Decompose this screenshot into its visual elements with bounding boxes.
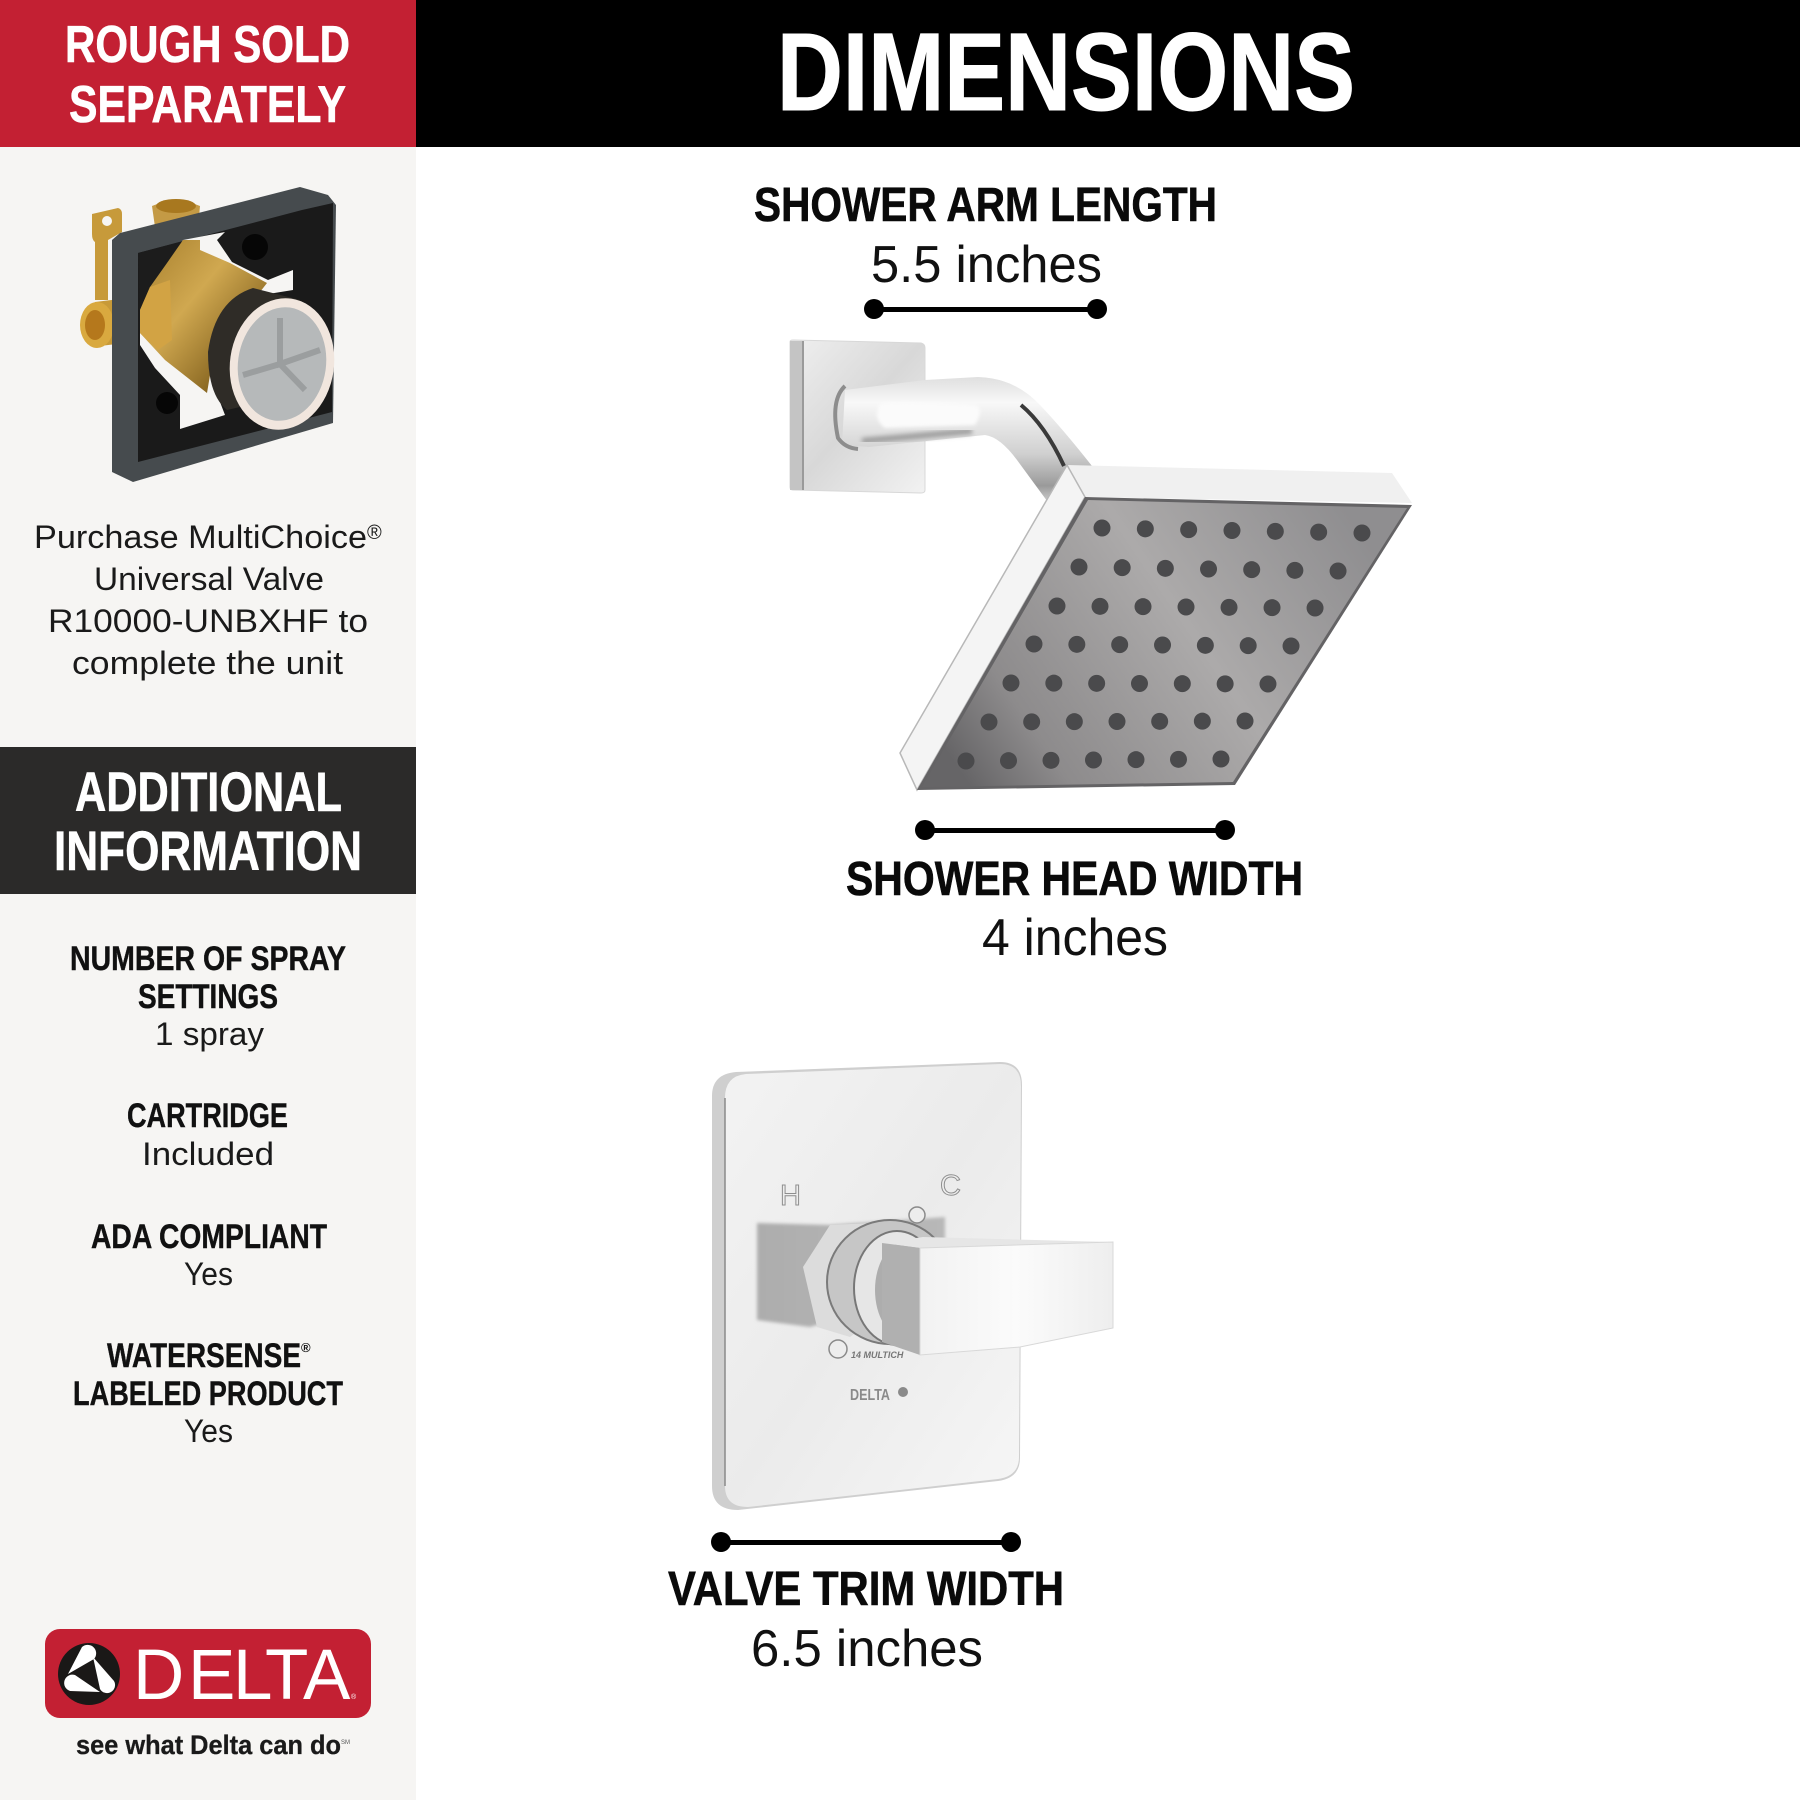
text: cartridge: [127, 1097, 288, 1172]
text: purchase note: Purchase MultiChoice: [34, 519, 367, 555]
dimension line: valve trim: [711, 1532, 1021, 1552]
valve body shadow: [757, 1217, 945, 1327]
text: cartridge: CARTRIDGE: [127, 1097, 288, 1135]
panel: left sidebar background: [0, 0, 416, 1800]
text: ada compliant: ADA COMPLIANT: [91, 1218, 327, 1256]
banner: additional information: ADDITIONAL: [75, 760, 342, 823]
text: purchase note: complete the unit: [72, 645, 343, 681]
banner: rough sold separately: ROUGH SOLD: [65, 16, 350, 74]
handle collar: [803, 1220, 953, 1345]
banner: additional information: INFORMATION: [54, 819, 362, 882]
text: purchase note: Universal Valve: [94, 561, 324, 597]
text: watersense labeled product: WATERSENSE: [107, 1337, 301, 1375]
label: valve trim width: 6.5 inches: [751, 1620, 983, 1678]
H and C markings: H: [780, 1180, 801, 1212]
banner: rough sold separately: SEPARATELY: [69, 76, 346, 134]
wall flange: [790, 340, 925, 493]
text: ada compliant: Yes: [184, 1256, 233, 1292]
text: watersense labeled product: ®: [301, 1340, 311, 1355]
banner: additional information: [0, 747, 416, 894]
dimension line: shower arm: [864, 299, 1107, 319]
label: valve trim width: [668, 1563, 1064, 1678]
text: purchase note: ®: [367, 522, 382, 544]
label: valve trim width: VALVE TRIM WIDTH: [668, 1563, 1064, 1616]
text: cartridge: Included: [142, 1136, 274, 1172]
dimension line: shower head: [915, 820, 1235, 840]
spray nozzles: [966, 528, 1362, 761]
label: shower arm length: 5.5 inches: [871, 236, 1102, 294]
screws: [829, 1207, 925, 1358]
plate logo mark: [898, 1387, 908, 1397]
H and C markings: [780, 1170, 961, 1212]
label: shower arm length: SHOWER ARM LENGTH: [754, 179, 1217, 232]
banner: dimensions title: [416, 0, 1800, 147]
text: purchase note: R10000-UNBXHF to: [48, 603, 368, 639]
H and C markings: C: [940, 1170, 961, 1202]
banner: rough sold separately: [0, 0, 416, 147]
logo: delta: [45, 1629, 371, 1760]
logo: delta: DELTA: [133, 1636, 351, 1715]
plate logo text: DELTA: [850, 1387, 890, 1404]
label: shower head width: SHOWER HEAD WIDTH: [846, 853, 1303, 906]
shower head spray face: [922, 500, 1407, 787]
logo: delta: ®: [351, 1693, 357, 1701]
text: watersense labeled product: LABELED PRODUCT: [73, 1375, 343, 1413]
tiny model text: 14 MULTICH: [851, 1350, 904, 1360]
illustration: shower head and arm: [790, 340, 1412, 790]
text: watersense labeled product: Yes: [184, 1413, 233, 1449]
text: number of spray settings: SETTINGS: [138, 978, 278, 1016]
text: number of spray settings: [70, 940, 346, 1052]
logo: delta: SM: [341, 1740, 350, 1746]
shower head body: [900, 465, 1412, 790]
text: watersense labeled product: [73, 1337, 343, 1449]
shower arm: [842, 377, 1092, 505]
logo: delta: see what Delta can do: [76, 1730, 341, 1760]
label: shower head width: 4 inches: [982, 909, 1168, 967]
text: number of spray settings: 1 spray: [155, 1016, 264, 1052]
label: shower head width: [846, 853, 1303, 967]
text: purchase note: [34, 519, 382, 681]
label: shower arm length: [754, 179, 1217, 294]
banner: dimensions title: DIMENSIONS: [777, 11, 1355, 134]
trim plate: [712, 1062, 1022, 1510]
text: ada compliant: [91, 1218, 327, 1292]
illustration: valve trim and handle: [712, 1062, 1113, 1510]
lever handle: [882, 1237, 1113, 1355]
icon: rough-in valve photo: [80, 187, 343, 482]
text: number of spray settings: NUMBER OF SPRAY: [70, 940, 346, 978]
